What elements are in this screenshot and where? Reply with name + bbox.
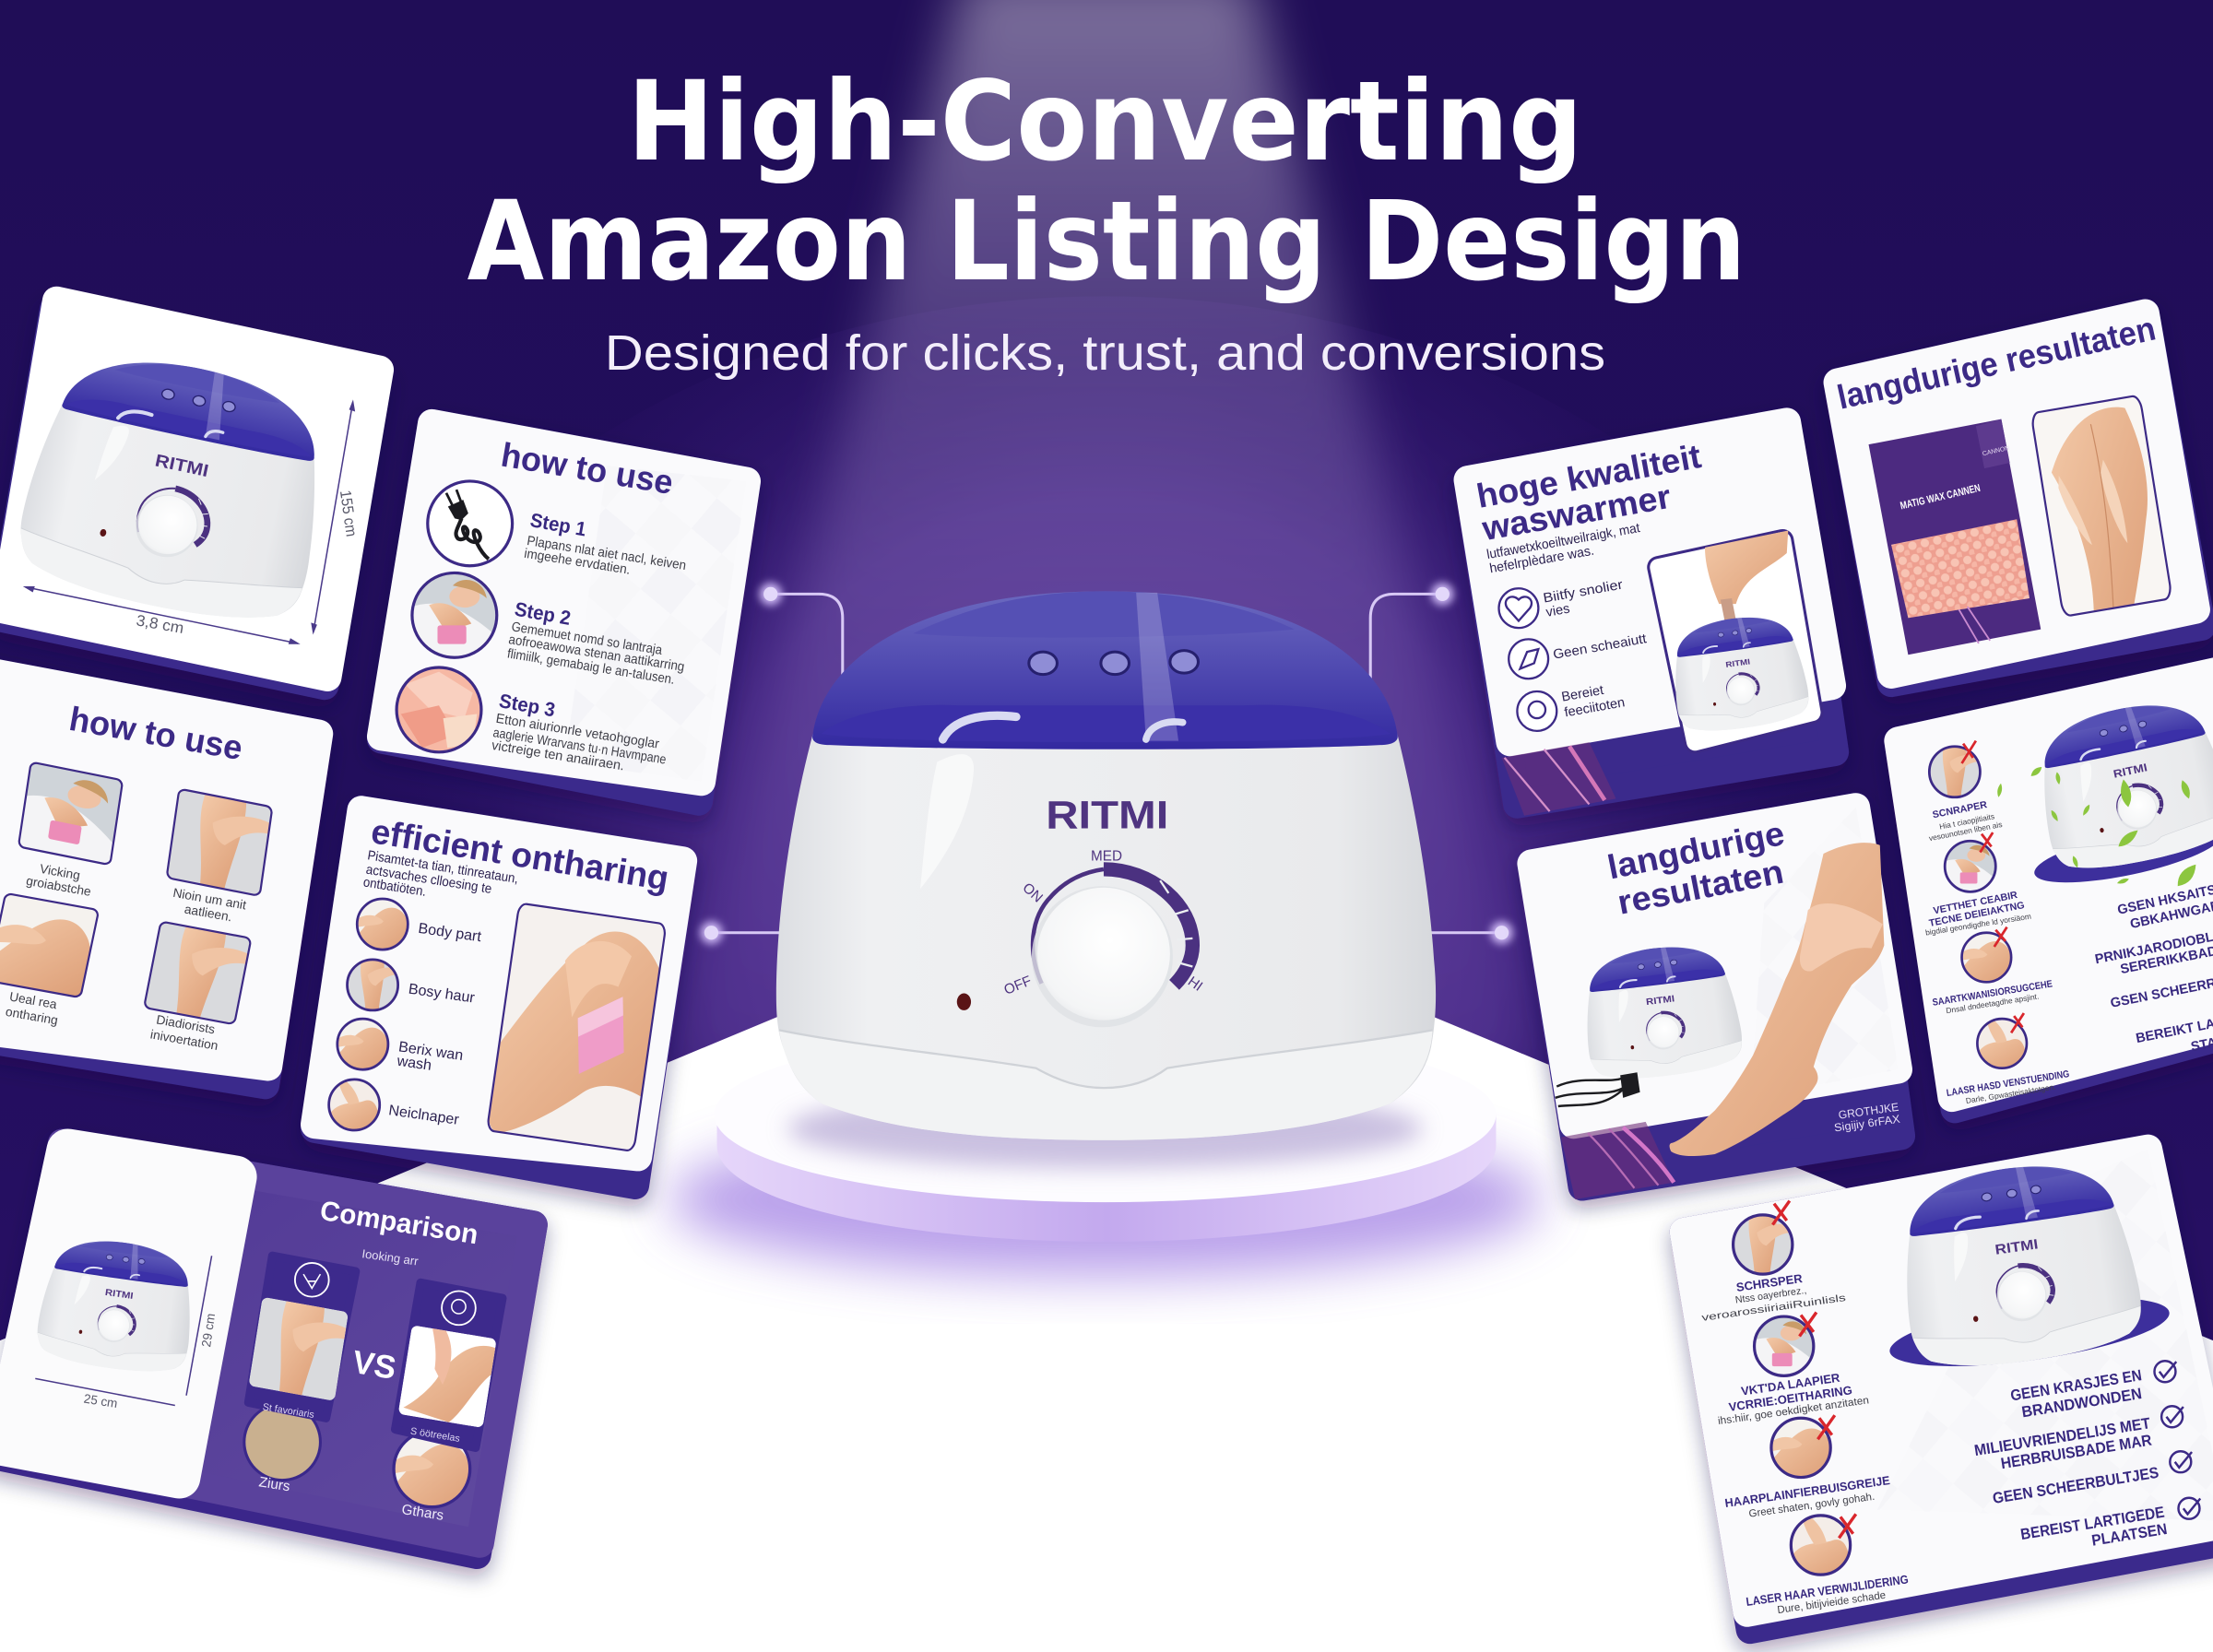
step 2 text: aofroeawowa stenan aattikarring — [507, 632, 685, 675]
dial labels: ON — [1019, 880, 1046, 906]
step 3 text: Etton aiurionrle vetaohgoglar — [495, 712, 660, 752]
item labels: SCNRAPER — [1932, 799, 1988, 820]
item labels: SCHRSPER — [1735, 1271, 1804, 1294]
grid captions: Diadiorists — [155, 1012, 216, 1036]
VS label: VS — [350, 1344, 398, 1386]
feature labels: Bereiet — [1560, 683, 1604, 705]
platform — [668, 1027, 1543, 1277]
photo A — [18, 762, 123, 865]
item labels: LASER HAAR VERWIJLIDERING — [1746, 1572, 1909, 1609]
column B: S öötreelas — [409, 1426, 461, 1445]
leg — [1670, 843, 1884, 1156]
step 2 text — [506, 598, 685, 688]
power cord — [1556, 1078, 1626, 1106]
step 3 text — [491, 690, 668, 773]
benefit labels — [1973, 1366, 2169, 1550]
feature labels: Biitfy snolier — [1542, 578, 1624, 607]
benefit labels: MILIEUVRIENDELIJS MET — [1973, 1414, 2152, 1459]
description: hefelrplèdare was. — [1488, 544, 1595, 576]
description: Pisamtet-ta tian, ttinreataun, — [366, 848, 519, 887]
step 1 text: Step 1 — [528, 509, 588, 540]
product image — [1890, 1152, 2147, 1376]
product image — [2027, 690, 2213, 879]
panel: how to use steps — [381, 423, 747, 801]
step 3 text: aaglerie Wrarvans tu·n Havmpane — [492, 726, 668, 768]
benefit labels: GEEN KRASJES EN — [2009, 1366, 2143, 1404]
panel: langdurige resultaten with wax bag — [1834, 309, 2202, 683]
item labels: Dure, bitijvieide schade — [1777, 1590, 1887, 1616]
step 1 text: Plapans nlat aiet nacl, keiven — [526, 534, 687, 573]
heading: how to use — [66, 700, 245, 767]
band caption: Sigijiy 6rFAX — [1833, 1113, 1900, 1135]
dial labels: MED — [1091, 849, 1122, 865]
subheading: Iooking arr — [361, 1246, 420, 1268]
heading: how to use — [499, 436, 676, 502]
benefit labels: HERBRUISBADE MAR — [2000, 1432, 2153, 1472]
heading: resultaten — [1615, 853, 1786, 922]
dial labels — [1001, 849, 1205, 998]
wax bag: CANNON — [1982, 445, 2010, 457]
item images — [1734, 1215, 1851, 1575]
feature icons — [1499, 588, 1556, 731]
item labels: VETTHET CEABIR — [1933, 890, 2018, 916]
heading: langdurige resultaten — [1834, 309, 2159, 417]
item labels: VKT'DA LAAPIER — [1740, 1371, 1841, 1398]
light beam — [670, 0, 1538, 1072]
photo D — [144, 921, 251, 1024]
photo: wax strip on leg — [487, 903, 666, 1151]
band caption: GROTHJKE — [1838, 1101, 1899, 1122]
feature labels: Berix wan — [397, 1038, 464, 1064]
dimension lines — [26, 402, 354, 643]
white product panel — [5, 1150, 236, 1478]
connector lines — [700, 583, 1513, 944]
grid captions: Nioin um anit — [172, 886, 247, 913]
heading: waswarmer — [1478, 478, 1674, 548]
product image — [1578, 939, 1746, 1085]
benefit labels: GEEN SCHEERBULTJES — [1992, 1464, 2160, 1507]
product image: RITMI — [104, 1288, 134, 1302]
item labels — [1701, 1271, 1909, 1616]
title — [467, 58, 1746, 306]
grid captions: groiabstche — [25, 874, 92, 899]
feature labels: Bosy haur — [408, 981, 477, 1007]
item labels: Dnsal dndeetagdhe apsjint. — [1946, 991, 2040, 1015]
item labels: SAARTKWANISIORSUGCEHE — [1932, 978, 2053, 1009]
decorative band stripes — [1502, 742, 1616, 816]
product image: RITMI — [153, 450, 210, 480]
item labels: HAARPLAINFIERBUISGREIJE — [1724, 1473, 1891, 1510]
dimension labels: 25 cm — [83, 1392, 118, 1410]
step 3 image — [396, 667, 481, 752]
item labels: Darle, Gpwasteisaktotgen. — [1965, 1082, 2056, 1105]
title: Amazon Listing Design — [467, 178, 1746, 306]
photo: warmer with hand: RITMI — [1725, 656, 1751, 669]
heading: hoge kwaliteit — [1473, 437, 1704, 515]
item images — [1929, 747, 2027, 1068]
column B — [394, 1282, 503, 1524]
description: ontbatiöten. — [362, 875, 427, 900]
item labels: veroarossiiriaiiRuinlisls — [1701, 1292, 1846, 1324]
step 1 text — [523, 509, 687, 578]
item labels: vesounotsen liben ais — [1928, 820, 2003, 843]
column A — [244, 1256, 356, 1494]
panel: comparison — [0, 1143, 534, 1555]
step 3 text: Step 3 — [497, 690, 557, 721]
item labels: Greet shaten, govly gohah. — [1748, 1492, 1876, 1520]
benefit labels — [2094, 882, 2213, 1055]
feature labels: feeciitoten — [1563, 695, 1626, 720]
panel: scraper comparison large — [1684, 1149, 2213, 1630]
column B: Gthars — [400, 1502, 445, 1524]
dimension labels — [83, 1313, 218, 1410]
photo B — [167, 789, 272, 896]
benefit labels: BEREIST LARTIGEDE — [2019, 1504, 2166, 1543]
description: actsvaches clloesing te — [365, 863, 492, 897]
product base — [1886, 1284, 2173, 1380]
heading — [1604, 814, 1788, 922]
heading: Comparison — [318, 1196, 480, 1250]
grid captions: aatlieen. — [183, 903, 233, 924]
description: lutfawetxkoeiltweilraigk, mat — [1485, 521, 1641, 562]
panel: how to use grid — [0, 663, 319, 1085]
feature labels — [387, 920, 483, 1128]
product image: RITMI — [1994, 1236, 2039, 1258]
item labels: TECNE DEIEIAKTNG — [1928, 900, 2026, 929]
heading: efficient ontharing — [369, 811, 671, 898]
photo C — [0, 893, 99, 997]
feature labels: Geen scheaiutt — [1552, 631, 1648, 663]
main product: wax warmer — [776, 591, 1436, 1140]
grid captions — [5, 862, 247, 1053]
photo: warmer with hand — [1658, 531, 1812, 742]
panel: scraper comparison with leaves — [1899, 656, 2213, 1109]
icon: plug — [1620, 1072, 1640, 1098]
benefit labels: BRANDWONDEN — [2020, 1385, 2143, 1421]
height label: 155 cm — [337, 490, 361, 537]
red crosses — [1772, 1201, 1856, 1538]
background glow — [314, 296, 1896, 1510]
feature labels: vies — [1544, 602, 1571, 620]
product base — [2030, 813, 2213, 894]
feature labels: Body part — [418, 920, 483, 945]
column A: Ziurs — [258, 1474, 291, 1494]
product image — [10, 339, 344, 635]
benefit labels: PLAATSEN — [2090, 1520, 2169, 1550]
grid captions: ontharing — [5, 1005, 59, 1028]
dial labels: OFF — [1001, 974, 1034, 998]
item labels: LAASR HASD VENSTUENDING — [1946, 1068, 2070, 1099]
product image: RITMI — [2112, 761, 2148, 781]
item labels: bigdial geondigdhe ld yorsiäom — [1924, 912, 2031, 938]
feature labels — [1542, 578, 1648, 720]
bag label: MATIG WAX CANNEN — [1899, 483, 1982, 512]
band caption — [1833, 1101, 1900, 1135]
item labels: ihs:hiir, goe oekdigket anzitaten — [1717, 1395, 1870, 1427]
feature icons — [329, 899, 408, 1130]
dimension lines — [35, 1256, 212, 1405]
decorative band stripes — [1561, 1122, 1674, 1199]
white floor — [0, 880, 2213, 1652]
step 1 text: imgeehe ervdatien. — [523, 547, 632, 578]
item labels: Hia t ciaopjitiaits — [1938, 811, 1995, 832]
title: High-Converting — [627, 58, 1583, 186]
heading: langdurige — [1604, 814, 1788, 886]
panel: hoge kwaliteit waswarmer — [1468, 422, 1835, 816]
item labels — [1924, 799, 2070, 1105]
icon: power plug — [428, 481, 513, 566]
item labels: Ntss oayerbrez., — [1734, 1285, 1807, 1306]
check icons — [2154, 1361, 2200, 1519]
column A: St favoriaris — [262, 1401, 315, 1421]
photo: legs — [2031, 395, 2172, 617]
width label: 3,8 cm — [135, 611, 185, 637]
step 2 text: Step 2 — [513, 598, 573, 630]
product image — [33, 1233, 201, 1378]
green leaves — [1996, 765, 2200, 890]
dial labels: HI — [1185, 974, 1205, 995]
panel: product dimensions — [2, 301, 380, 686]
product image: RITMI — [1646, 994, 1675, 1008]
description — [1485, 521, 1641, 576]
step 2 text: Gememuet nomd so lantraja — [510, 620, 664, 658]
wax bag — [1869, 419, 2041, 655]
feature labels: Neiclnaper — [387, 1102, 461, 1128]
red crosses — [1962, 741, 2024, 1032]
panel: langdurige resultaten with leg — [1532, 808, 1901, 1199]
step 2 text: flimiilk, gemabaig le an-talusen. — [506, 646, 676, 688]
step 3 text: victreige ten anaiiraen. — [491, 738, 625, 773]
panel: efficient ontharing — [314, 810, 683, 1186]
hand — [1800, 903, 1883, 972]
feature labels: wash — [396, 1053, 432, 1074]
dimension labels: 29 cm — [199, 1313, 218, 1348]
subtitle: Designed for clicks, trust, and conversions — [605, 326, 1605, 381]
step 2 image — [412, 572, 497, 657]
heading — [1473, 437, 1704, 548]
item labels: VCRRIE:OEITHARING — [1728, 1383, 1853, 1414]
grid captions: Vicking — [39, 862, 81, 882]
brand logo: RITMI — [1046, 793, 1168, 837]
grid captions: inivoertation — [149, 1027, 219, 1053]
grid captions: Ueal rea — [8, 989, 58, 1011]
